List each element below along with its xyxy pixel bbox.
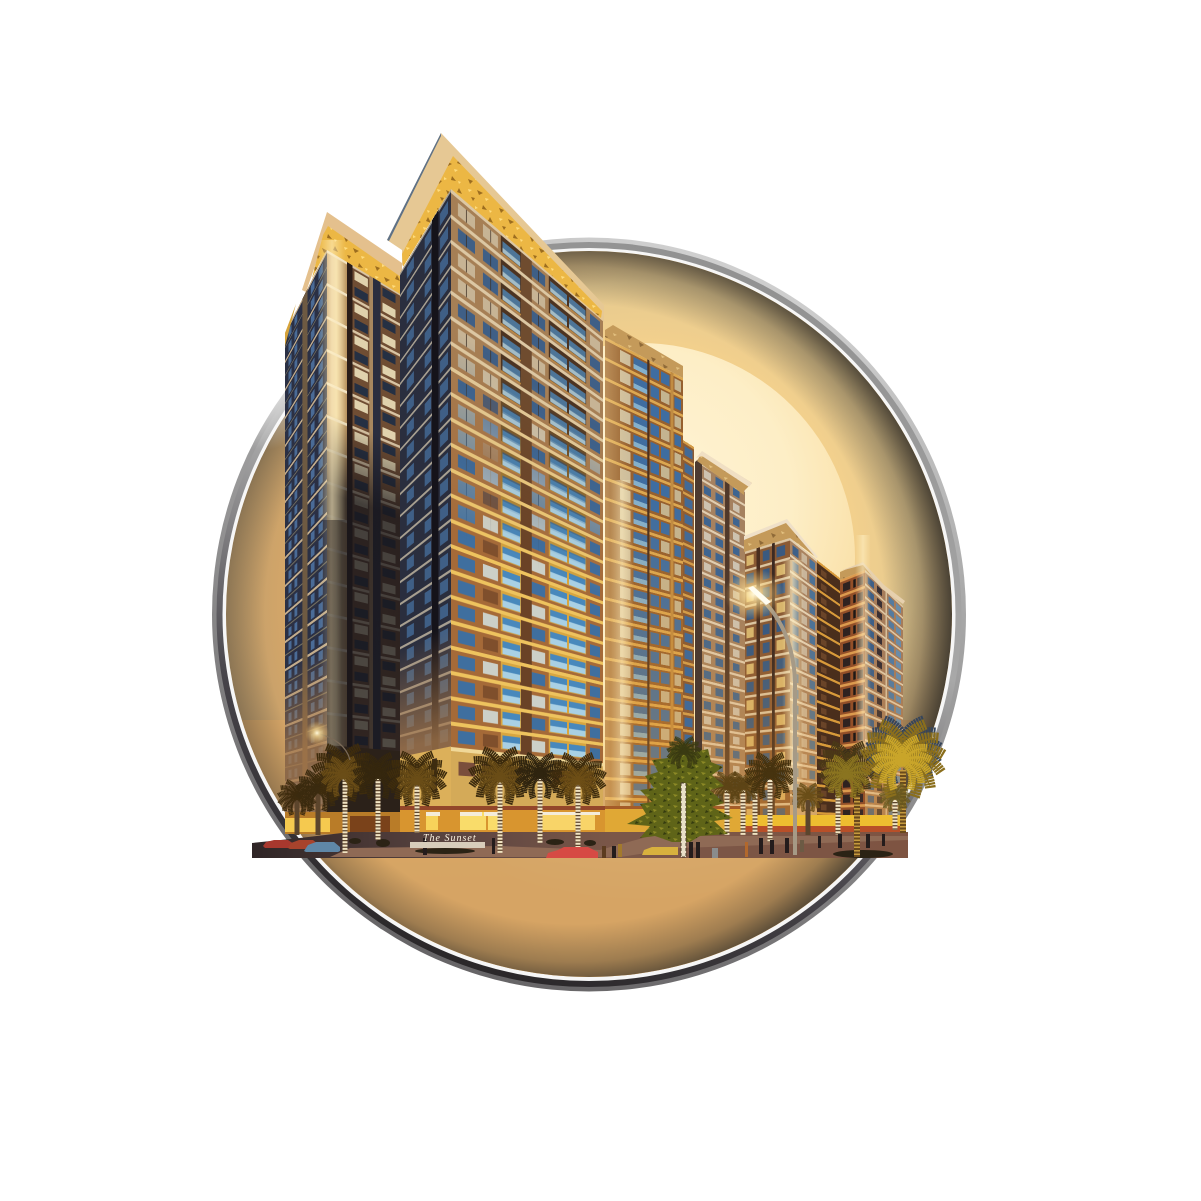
narrow link block <box>817 560 840 815</box>
big tower: dark side face <box>400 190 451 806</box>
golden disc <box>226 251 952 977</box>
sunset halo <box>560 254 940 720</box>
tall left tower: left face <box>285 250 327 812</box>
street lamp left <box>305 721 350 760</box>
tower six roof <box>840 562 905 604</box>
storefront row <box>285 806 905 834</box>
middle tower main face <box>605 337 683 806</box>
middle tower gold crown <box>605 325 683 378</box>
tower four main face <box>702 464 745 806</box>
middle tower stepped sliver <box>683 440 694 752</box>
pedestrians <box>423 834 885 858</box>
foreground gold palm <box>862 715 944 797</box>
tall left tower: main face <box>327 250 400 812</box>
circular medallion background <box>212 238 966 992</box>
pale sun circle <box>603 343 855 770</box>
palm crowns <box>278 741 910 815</box>
far right tower: right face <box>865 570 903 815</box>
podium <box>451 747 603 827</box>
inner dark ring <box>216 242 962 987</box>
white highlight ring <box>222 248 956 981</box>
ground strip with road and pavement <box>252 832 908 858</box>
outer metal ring <box>212 238 966 992</box>
tower five roof <box>744 519 818 558</box>
tower five: right face <box>790 538 817 806</box>
palm trunks <box>297 770 903 857</box>
project sign <box>410 833 485 848</box>
sign lettering: The Sunset <box>423 833 477 844</box>
pavement highlights <box>330 836 908 857</box>
tower four roof <box>696 451 752 495</box>
big tower: lit main face <box>451 189 603 806</box>
conifer tree <box>627 736 733 857</box>
light streaks on facades <box>318 240 871 800</box>
parked cars <box>263 840 678 858</box>
street lamp right <box>724 568 795 855</box>
planter shrubs <box>349 838 893 858</box>
soft white haze behind tower <box>187 240 337 450</box>
tower five: left face <box>745 538 790 815</box>
far right tower: left face <box>840 570 865 815</box>
